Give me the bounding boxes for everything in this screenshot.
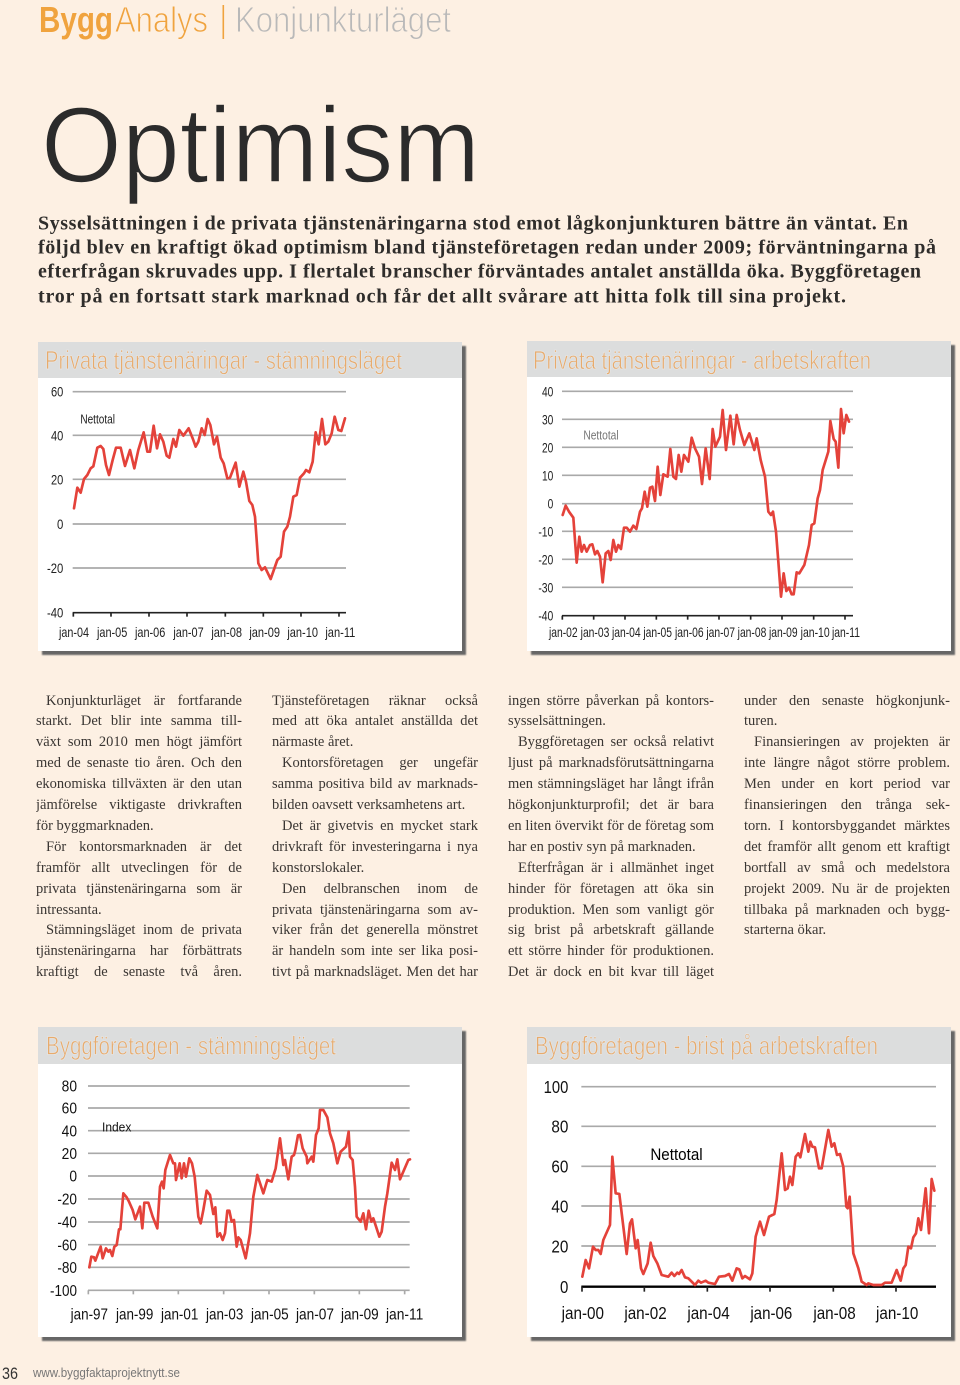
line chart: jan-02 xyxy=(623,1303,667,1323)
line chart: jan-00 xyxy=(561,1303,604,1323)
body text column 4: bortfall av små och medelstora xyxy=(744,860,950,876)
panel: Privata tjänstenäringar - stämningsläget xyxy=(38,342,466,655)
body text column 4: finansieringen den trånga sek- xyxy=(744,797,950,813)
line chart: 20 xyxy=(62,1146,77,1163)
body text column 2: tivt på marknadsläget. Men det har xyxy=(272,964,478,980)
line chart: jan-02 xyxy=(548,624,578,640)
body text column 3: hinder för företagen att öka sin xyxy=(508,881,714,897)
line chart: 20 xyxy=(542,439,553,455)
line chart: Nettotal xyxy=(583,429,619,443)
panel: Byggföretagen - stämningsläget xyxy=(38,1027,466,1341)
body text column 4: projekt 2009. Nu är de projekten xyxy=(744,881,950,897)
line chart: -20 xyxy=(538,551,553,567)
line chart: jan-10 xyxy=(800,624,830,640)
line chart: 20 xyxy=(551,1236,568,1256)
body text column 1: Stämningsläget inom de privata xyxy=(46,922,242,938)
line chart: jan-07 xyxy=(173,624,204,640)
line chart: jan-11 xyxy=(325,624,355,640)
body text column 2: privata tjänstenäringarna som av- xyxy=(272,902,478,918)
line chart: jan-04 xyxy=(686,1303,730,1323)
line chart: jan-07 xyxy=(295,1307,334,1324)
line chart: 40 xyxy=(62,1123,77,1140)
line chart: 0 xyxy=(57,516,64,532)
line chart: 30 xyxy=(542,411,553,427)
line chart: 40 xyxy=(542,383,553,399)
line chart: jan-08 xyxy=(737,624,766,640)
line chart xyxy=(538,383,860,640)
line chart xyxy=(50,1079,423,1324)
line chart: 80 xyxy=(551,1117,568,1137)
body text column 4: torn. I kontorsbyggandet märktes xyxy=(744,818,950,834)
line chart: jan-01 xyxy=(160,1307,198,1324)
line chart: jan-09 xyxy=(340,1307,379,1324)
body text column 4: tillbaka på marknaden och bygg- xyxy=(744,902,950,918)
line chart: Nettotal xyxy=(650,1145,703,1164)
body text column 3: Det är dock en bit kvar till läget xyxy=(508,964,714,980)
body text column 4: det framför allt genom ett kraftigt xyxy=(744,839,950,855)
body text column 3: har en postiv syn på marknaden. xyxy=(508,839,696,855)
body text column 3: Efterfrågan är i allmänhet inget xyxy=(518,860,714,876)
body text column 4: turen. xyxy=(744,713,777,729)
body text column 2: bilden oavsett verksamhetens art. xyxy=(272,797,465,813)
body text column 3: men stämningsläget har långt ifrån xyxy=(508,776,714,792)
body text column 2: samma positiva bild av marknads- xyxy=(272,776,478,792)
title: Optimism xyxy=(41,84,480,205)
line chart: -30 xyxy=(538,579,553,595)
body text column 3: en liten övervikt för de företag som xyxy=(508,818,714,834)
line chart: -60 xyxy=(57,1237,77,1254)
footer url: www.byggfaktaprojektnytt.se xyxy=(32,1365,180,1380)
body text column 3: högkonjunkturprofil; det är bara xyxy=(508,797,714,813)
body text column 4: starterna ökar. xyxy=(744,922,826,938)
line chart: jan-05 xyxy=(96,624,128,640)
line chart xyxy=(544,1077,936,1323)
body text column 3 xyxy=(508,692,714,980)
body text column 1 xyxy=(36,692,242,980)
body text column 3: ett större hinder för produktionen. xyxy=(508,943,714,959)
lead paragraph: tror på en fortsatt stark marknad och får det allt svårare att hitta folk till sina projekt. xyxy=(38,286,846,308)
line chart: -100 xyxy=(50,1283,77,1300)
body text column 3: produktion. Men som vanligt gör xyxy=(508,902,714,918)
body text column 1: För kontorsmarknaden är det xyxy=(46,839,242,855)
line chart: jan-06 xyxy=(749,1303,792,1323)
line chart: 80 xyxy=(62,1079,77,1096)
body text column 1: jämförelse viktigaste drivkraften xyxy=(36,797,242,813)
body text column 2: viker från det generella mönstret xyxy=(272,922,478,938)
line chart: jan-03 xyxy=(205,1307,243,1324)
line chart: jan-08 xyxy=(211,624,242,640)
line chart: jan-11 xyxy=(385,1307,423,1324)
line chart: 20 xyxy=(51,472,64,488)
line chart: jan-09 xyxy=(249,624,280,640)
body text column 2: med att öka antalet anställda det xyxy=(272,713,478,729)
body text column 3: ljust på marknadsförutsättningarna xyxy=(508,755,714,771)
body text column 2: Det är givetvis en mycket stark xyxy=(282,818,478,834)
header: section label: Bygg xyxy=(39,0,113,40)
lead paragraph: följd blev en kraftigt ökad optimism bland tjänsteföretagen redan under 2009; förväntningarna på xyxy=(38,236,936,258)
line chart: -20 xyxy=(57,1192,77,1209)
body text column 3: sysselsättningen. xyxy=(508,713,606,729)
body text column 1: privata tjänstenäringarna som är xyxy=(36,881,242,897)
body text column 1: starkt. Det blir inte samma till- xyxy=(36,713,242,729)
line chart: jan-09 xyxy=(768,624,798,640)
body text column 1: Konjunkturläget är fortfarande xyxy=(46,692,242,708)
chart title: Byggföretagen - brist på arbetskraften xyxy=(535,1030,878,1060)
header: section label: Konjunkturläget xyxy=(235,0,451,40)
chart title: Privata tjänstenäringar - stämningsläget xyxy=(45,345,403,375)
page number: 36 xyxy=(2,1364,18,1383)
line chart: 10 xyxy=(542,467,553,483)
line chart: 40 xyxy=(551,1196,568,1216)
body text column 2: drivkraft för investeringarna i nya xyxy=(272,839,478,855)
panel: Privata tjänstenäringar - arbetskraften xyxy=(527,341,955,655)
lead paragraph xyxy=(38,212,936,308)
line chart: jan-04 xyxy=(611,624,641,640)
lead paragraph: Sysselsättningen i de privata tjänstenäringarna stod emot lågkonjunkturen bättre än väntat. En xyxy=(38,212,908,234)
line chart: 60 xyxy=(62,1101,77,1118)
body text column 4: Finansieringen av projekten är xyxy=(754,734,950,750)
line chart xyxy=(47,384,355,640)
body text column 2: närmaste året. xyxy=(272,734,353,750)
line chart: -40 xyxy=(538,608,553,624)
body text column 2: konstorslokaler. xyxy=(272,860,364,876)
line chart: jan-08 xyxy=(812,1303,856,1323)
body text column 2: Kontorsföretagen ger ungefär xyxy=(282,755,478,771)
line chart: jan-06 xyxy=(674,624,704,640)
line chart: -40 xyxy=(47,605,64,621)
body text column 2 xyxy=(272,692,478,980)
body text column 1: tjänstenäringarna har förbättrats xyxy=(36,943,242,959)
body text column 1: med de senaste tio åren. Och den xyxy=(36,755,242,771)
line chart: 0 xyxy=(69,1169,77,1186)
line chart: jan-11 xyxy=(831,624,860,640)
body text column 4: Men under en kort period var xyxy=(744,776,950,792)
line chart: Index xyxy=(102,1120,132,1134)
body text column 1: för byggmarknaden. xyxy=(36,818,154,834)
line chart: 40 xyxy=(51,427,64,443)
line chart: jan-10 xyxy=(875,1303,918,1323)
panel: Byggföretagen - brist på arbetskraften xyxy=(527,1027,955,1341)
line chart: jan-10 xyxy=(287,624,318,640)
body text column 4: under den senaste högkonjunk- xyxy=(744,692,950,708)
line chart: jan-05 xyxy=(250,1307,289,1324)
line chart: -80 xyxy=(57,1260,77,1277)
line chart: 0 xyxy=(548,496,553,512)
body text column 3: Byggföretagen ser också relativt xyxy=(518,734,714,750)
body text column 2: Tjänsteföretagen räknar också xyxy=(272,692,478,708)
line chart: 60 xyxy=(51,384,64,400)
body text column 3: ingen större påverkan på kontors- xyxy=(508,692,714,708)
line chart: jan-97 xyxy=(70,1307,108,1324)
line chart: Nettotal xyxy=(80,412,115,426)
body text column 2: Den delbranschen inom de xyxy=(282,881,478,897)
line chart: jan-99 xyxy=(115,1307,153,1324)
body text column 2: är handeln som inte ser lika posi- xyxy=(272,943,478,959)
line chart: jan-06 xyxy=(134,624,166,640)
body text column 4 xyxy=(744,692,950,938)
header: section label xyxy=(39,0,451,40)
line chart: -20 xyxy=(47,560,64,576)
line chart: jan-07 xyxy=(706,624,735,640)
body text column 1: växt som 2010 men högt jämfört xyxy=(36,734,242,750)
lead paragraph: efterfrågan skruvades upp. I flertalet branscher förväntades antalet anställda öka. Byggföretagen xyxy=(38,260,921,282)
line chart: jan-05 xyxy=(643,624,672,640)
body text column 4: inte längre något större problem. xyxy=(744,755,950,771)
body text column 1: intressanta. xyxy=(36,902,102,918)
line chart: -40 xyxy=(57,1215,77,1232)
body text column 1: ekonomiska tillväxten är den utan xyxy=(36,776,242,792)
line chart: jan-03 xyxy=(580,624,609,640)
body text column 1: kraftigt de senaste två åren. xyxy=(36,964,242,980)
body text column 1: framför allt utveclingen för de xyxy=(36,860,242,876)
line chart: 60 xyxy=(551,1157,568,1177)
line chart: 100 xyxy=(544,1077,568,1097)
line chart: jan-04 xyxy=(58,624,89,640)
line chart: -10 xyxy=(538,523,553,539)
line chart: 0 xyxy=(560,1277,568,1297)
chart title: Privata tjänstenäringar - arbetskraften xyxy=(533,345,871,375)
chart title: Byggföretagen - stämningsläget xyxy=(46,1030,337,1060)
header: section label: Analys xyxy=(115,0,208,40)
